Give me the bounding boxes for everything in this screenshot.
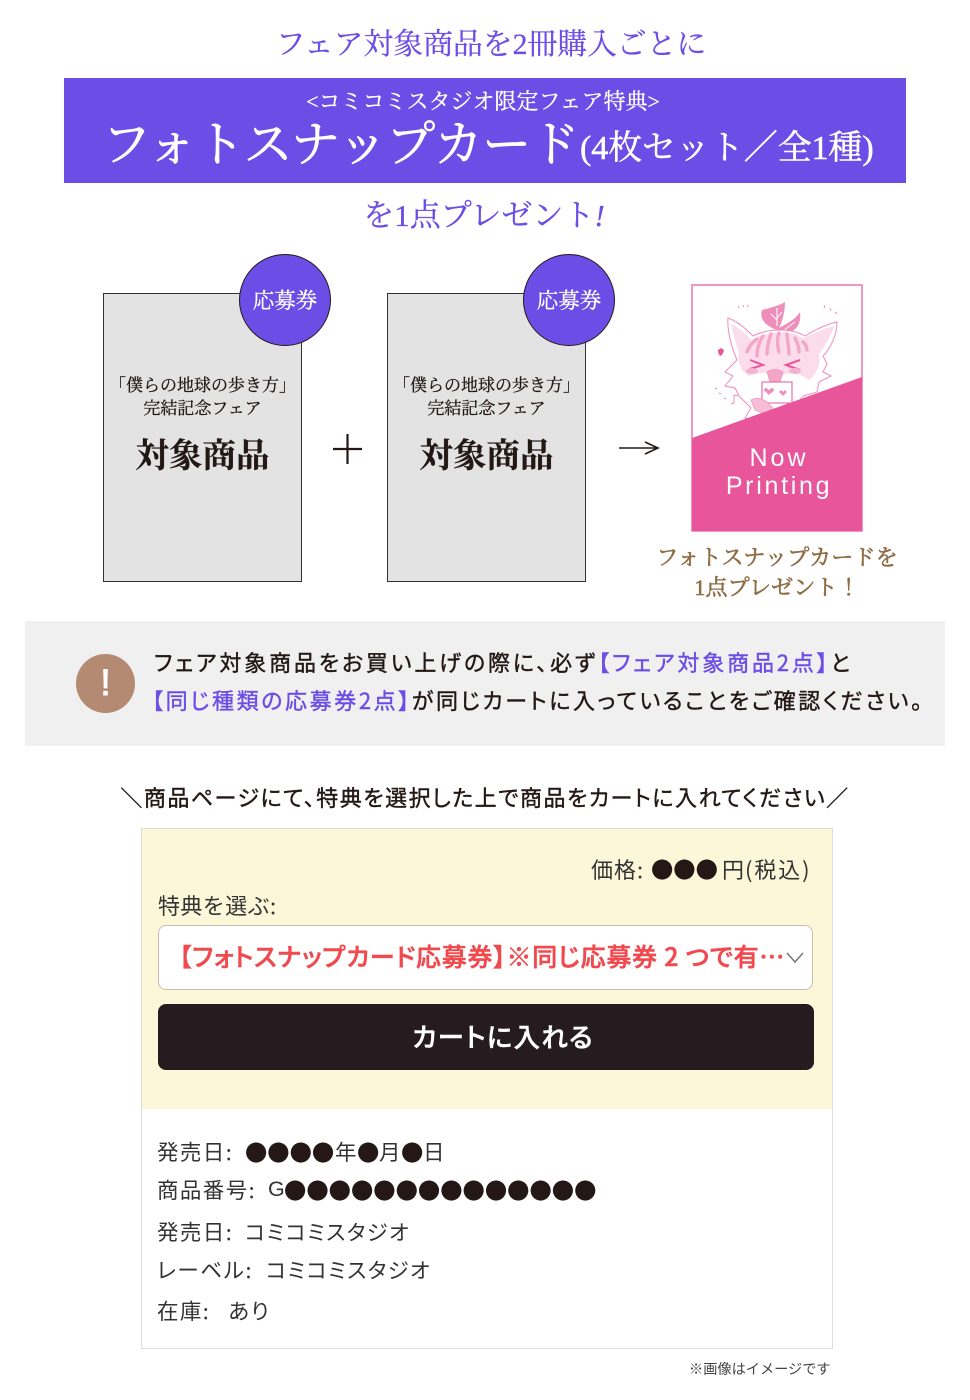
banner main title: フォトスナップカード [102,117,579,172]
banner subtitle: <コミコミスタジオ限定フェア特典> [306,89,660,114]
add to cart button [158,1004,814,1070]
card: target product 1 [103,293,302,582]
product number: G [268,1177,285,1201]
price [591,853,811,885]
badge: entry ticket 1: 応募券 [253,289,317,313]
stock [157,1295,271,1326]
add to cart button: カートに入れる [412,1016,594,1055]
label: コミコミスタジオ [266,1254,431,1285]
price: ●●● [651,853,718,885]
select box [158,925,813,990]
icon: exclamation: ! [100,662,111,703]
heading: one item gift: を1点プレゼント! [363,198,605,233]
publisher [157,1216,410,1247]
card 1 caption [109,376,296,418]
label: レーベル: [157,1254,253,1285]
image note: ※画像はイメージです [689,1362,831,1378]
heading: purchase condition: フェア対象商品を2冊購入ごとに [276,28,706,61]
stock: あり [228,1295,271,1326]
release date: 発売日: [157,1136,233,1167]
price: 円 [722,853,744,885]
banner set note: (4枚セット／全1種) [580,130,874,167]
label [157,1254,431,1285]
badge: entry ticket 2: 応募券 [537,289,601,313]
card caption: フォトスナップカードを [656,545,898,570]
product number: 商品番号: [157,1174,256,1205]
card 1 caption: 「僕らの地球の歩き方」 [109,376,296,395]
publisher: 発売日: [157,1216,233,1247]
release date: 日 [423,1136,445,1167]
card caption [656,545,898,600]
card 2 caption: 「僕らの地球の歩き方」 [393,376,580,395]
select text: 【フォトスナップカード応募券】※同じ応募券 2 つで有… [179,938,785,974]
release date [157,1136,445,1168]
release date: ●●●● [245,1136,334,1168]
release date: ● [401,1136,423,1168]
release date: ● [357,1136,379,1168]
product details [157,1136,596,1326]
card 2 label: 対象商品 [420,438,554,475]
card 2 caption: 完結記念フェア [427,399,546,418]
release date: 月 [379,1136,401,1167]
notice text line 2: 【同じ種類の応募券2点】が同じカートに入っていることをご確認ください。 [152,684,925,716]
plus sign [333,434,362,464]
product number: ●●●●●●●●●●●●●● [284,1174,596,1206]
publisher: コミコミスタジオ [245,1216,410,1247]
notice text line 1: フェア対象商品をお買い上げの際に、必ず【フェア対象商品2点】と [154,646,853,678]
option label: 特典を選ぶ: [158,889,277,921]
icon: chevron [786,952,804,963]
card 2 caption [393,376,580,418]
card 1 label: 対象商品 [136,438,270,475]
photo card illustration [691,284,863,532]
badge: entry ticket 2 [523,254,615,346]
product panel [141,828,833,1349]
instruction heading: ＼商品ページにて、特典を選択した上で商品をカートに入れてください／ [120,781,850,813]
price: 価格: [591,853,644,885]
photo card illustration: Printing [726,472,832,500]
notice panel [25,621,945,746]
icon: exclamation [76,654,135,713]
release date: 年 [335,1136,357,1167]
arrow [619,441,660,455]
card caption: 1点プレゼント！ [694,575,860,600]
badge: entry ticket 1 [239,254,331,346]
stock: 在庫: [157,1295,210,1326]
card 1 caption: 完結記念フェア [143,399,262,418]
card: target product 2 [387,293,586,582]
price: (税込) [745,853,811,885]
cart area [142,829,832,1109]
icon: cat mascot [715,302,837,422]
now printing text: Now [749,444,809,472]
banner: photo snap card [64,78,906,183]
